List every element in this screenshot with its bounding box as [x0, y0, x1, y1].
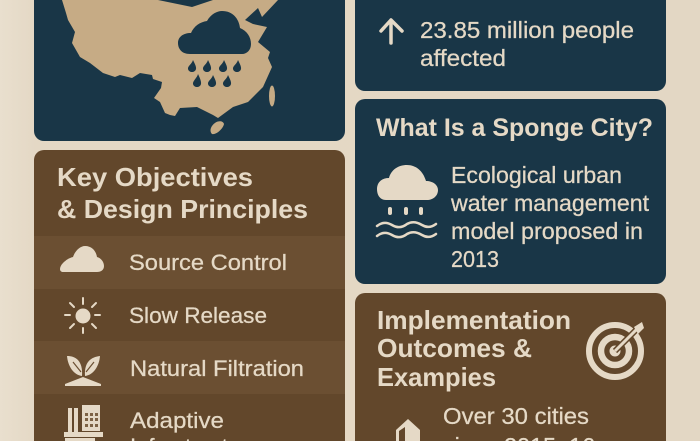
row: source control: [34, 236, 345, 289]
row: source control: Source Control: [129, 250, 287, 275]
heading: key objectives: & Design Principles: [57, 194, 308, 224]
text: definition: water management: [450, 190, 650, 216]
heading: implementation outcomes and examples: Implementation: [377, 305, 571, 335]
icon: rain cloud over map: [178, 11, 251, 87]
text: cities count: [443, 403, 595, 441]
text: definition: [450, 162, 650, 272]
row: slow release: [34, 289, 345, 341]
text: definition: model proposed in: [451, 218, 643, 244]
row: adaptive infrastructure: Adaptive: [130, 408, 224, 433]
row: natural filtration: Natural Filtration: [130, 356, 304, 381]
icon: up arrow: [381, 20, 402, 43]
map of China: [62, 0, 278, 134]
heading: what is a sponge city: What Is a Sponge City?: [376, 114, 653, 142]
heading: key objectives: Key Objectives: [57, 162, 253, 192]
row: slow release: Slow Release: [129, 303, 267, 328]
panel: Key Objectives and Design Principles: [34, 150, 345, 441]
text: definition: Ecological urban: [451, 162, 622, 188]
panel: what is a sponge city: [355, 99, 666, 284]
panel: people affected: [355, 0, 666, 91]
text: people affected: [420, 17, 634, 71]
heading: implementation outcomes and examples: Outcomes &: [377, 333, 532, 363]
row: natural filtration: [34, 341, 345, 394]
text: people affected: affected: [420, 45, 506, 71]
text: cities count: Over 30 cities: [443, 403, 589, 429]
icon: target with dart: [589, 322, 644, 377]
heading: key objectives: [57, 162, 308, 224]
panel: China map with rainfall: [34, 0, 345, 141]
text: definition: 2013: [451, 246, 499, 272]
heading: implementation outcomes and examples: [377, 305, 571, 392]
icon: building: [396, 419, 420, 441]
panel: implementation outcomes: [355, 293, 666, 441]
icon: cloud with rain and water: [377, 165, 438, 237]
row: adaptive infrastructure: [34, 394, 345, 441]
text: people affected: 23.85 million people: [420, 17, 634, 43]
heading: implementation outcomes and examples: Exampies: [377, 362, 496, 392]
